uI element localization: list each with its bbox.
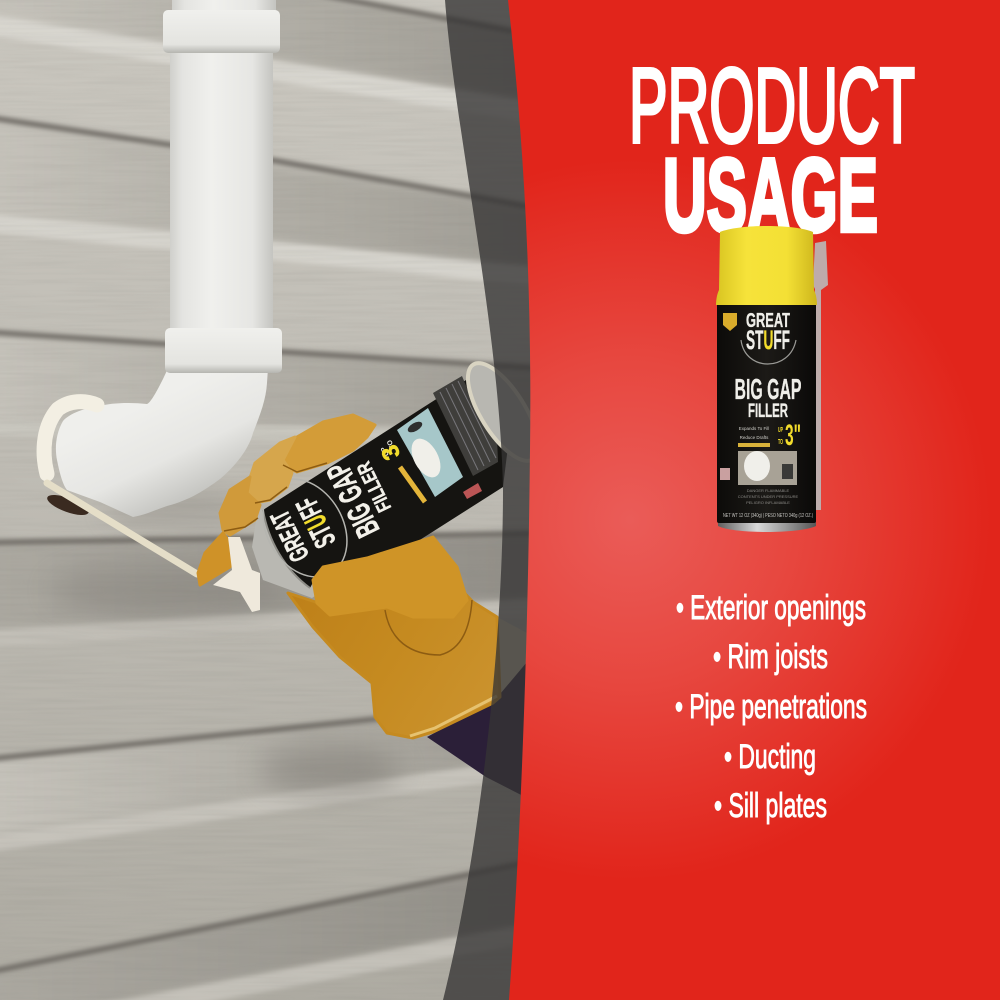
usage list: • Rim joists xyxy=(713,638,828,676)
logo arc xyxy=(741,340,796,364)
foam ring around pipe xyxy=(44,402,97,474)
pipe elbow xyxy=(56,364,268,517)
can label photo xyxy=(738,451,797,485)
can photo panel xyxy=(397,408,463,497)
photo: vinyl siding wall xyxy=(0,0,580,1000)
up to 3 inch callout: UP xyxy=(778,427,783,434)
usage list xyxy=(675,589,867,825)
can text: FILLER xyxy=(353,458,396,515)
can warning text xyxy=(723,488,813,519)
can open end xyxy=(455,353,551,471)
can warning text: CONTENTS UNDER PRESSURE xyxy=(738,494,799,499)
can flag xyxy=(720,468,730,480)
can flag xyxy=(463,483,482,499)
can text xyxy=(265,457,396,566)
can label text: STUFF xyxy=(746,325,790,355)
can up to 3 inch callout: 3 xyxy=(376,440,406,464)
can text: GREAT xyxy=(265,505,315,566)
glove palm xyxy=(288,560,500,738)
can label text: BIG GAP xyxy=(734,374,802,406)
usage list: • Ducting xyxy=(724,738,816,776)
hole in siding behind the pipe xyxy=(45,491,91,519)
translucent dark curved band xyxy=(443,0,560,1000)
product can: Expands To Fill xyxy=(739,426,769,431)
lower pipe collar xyxy=(165,328,282,373)
upper pipe collar xyxy=(163,10,280,53)
glove fingers xyxy=(198,415,467,617)
can label text: FILLER xyxy=(748,401,788,422)
can badge xyxy=(723,313,737,331)
can text: BIG GAP xyxy=(319,457,386,543)
up to 3 inch callout: 3" xyxy=(785,419,801,452)
can yellow strip xyxy=(400,467,425,502)
glove cuff xyxy=(495,617,527,700)
can text: STUFF xyxy=(290,492,343,553)
spray can on its side xyxy=(246,353,551,598)
can logo badge outline xyxy=(246,464,364,592)
can label text xyxy=(734,310,802,422)
glove seam lines xyxy=(224,463,472,655)
product can: Reduce Drafts xyxy=(740,435,769,440)
usage list: • Exterior openings xyxy=(676,589,866,627)
up to 3 inch callout xyxy=(778,419,801,452)
can label text: GREAT xyxy=(746,310,790,332)
can instructions block xyxy=(433,376,498,476)
usage list: • Sill plates xyxy=(714,787,827,825)
applicator straw xyxy=(813,241,828,510)
title xyxy=(629,47,915,254)
silver can base xyxy=(718,518,816,532)
hand in glove holding can xyxy=(198,353,551,798)
up to 3 inch callout: TO xyxy=(778,439,783,446)
usage list: • Pipe penetrations xyxy=(675,688,867,726)
can warning text: NET WT 12 OZ (340g) | PESO NETO 340g (12 OZ.) xyxy=(723,513,813,519)
foam bead from straw xyxy=(47,483,197,574)
can warning text: DANGER FLAMMABLE xyxy=(747,488,790,493)
yellow cap xyxy=(716,226,817,305)
foam nozzle xyxy=(213,537,260,612)
black can body xyxy=(717,303,816,523)
can up to 3 inch callout: UP xyxy=(380,445,391,457)
red panel xyxy=(508,0,1000,1000)
can up to 3 inch callout: TO xyxy=(386,438,397,450)
sleeve xyxy=(427,655,530,798)
product can xyxy=(716,226,828,532)
photo: white PVC pipe with elbow xyxy=(56,0,282,517)
can warning text: PELIGRO INFLAMABLE xyxy=(746,500,790,505)
